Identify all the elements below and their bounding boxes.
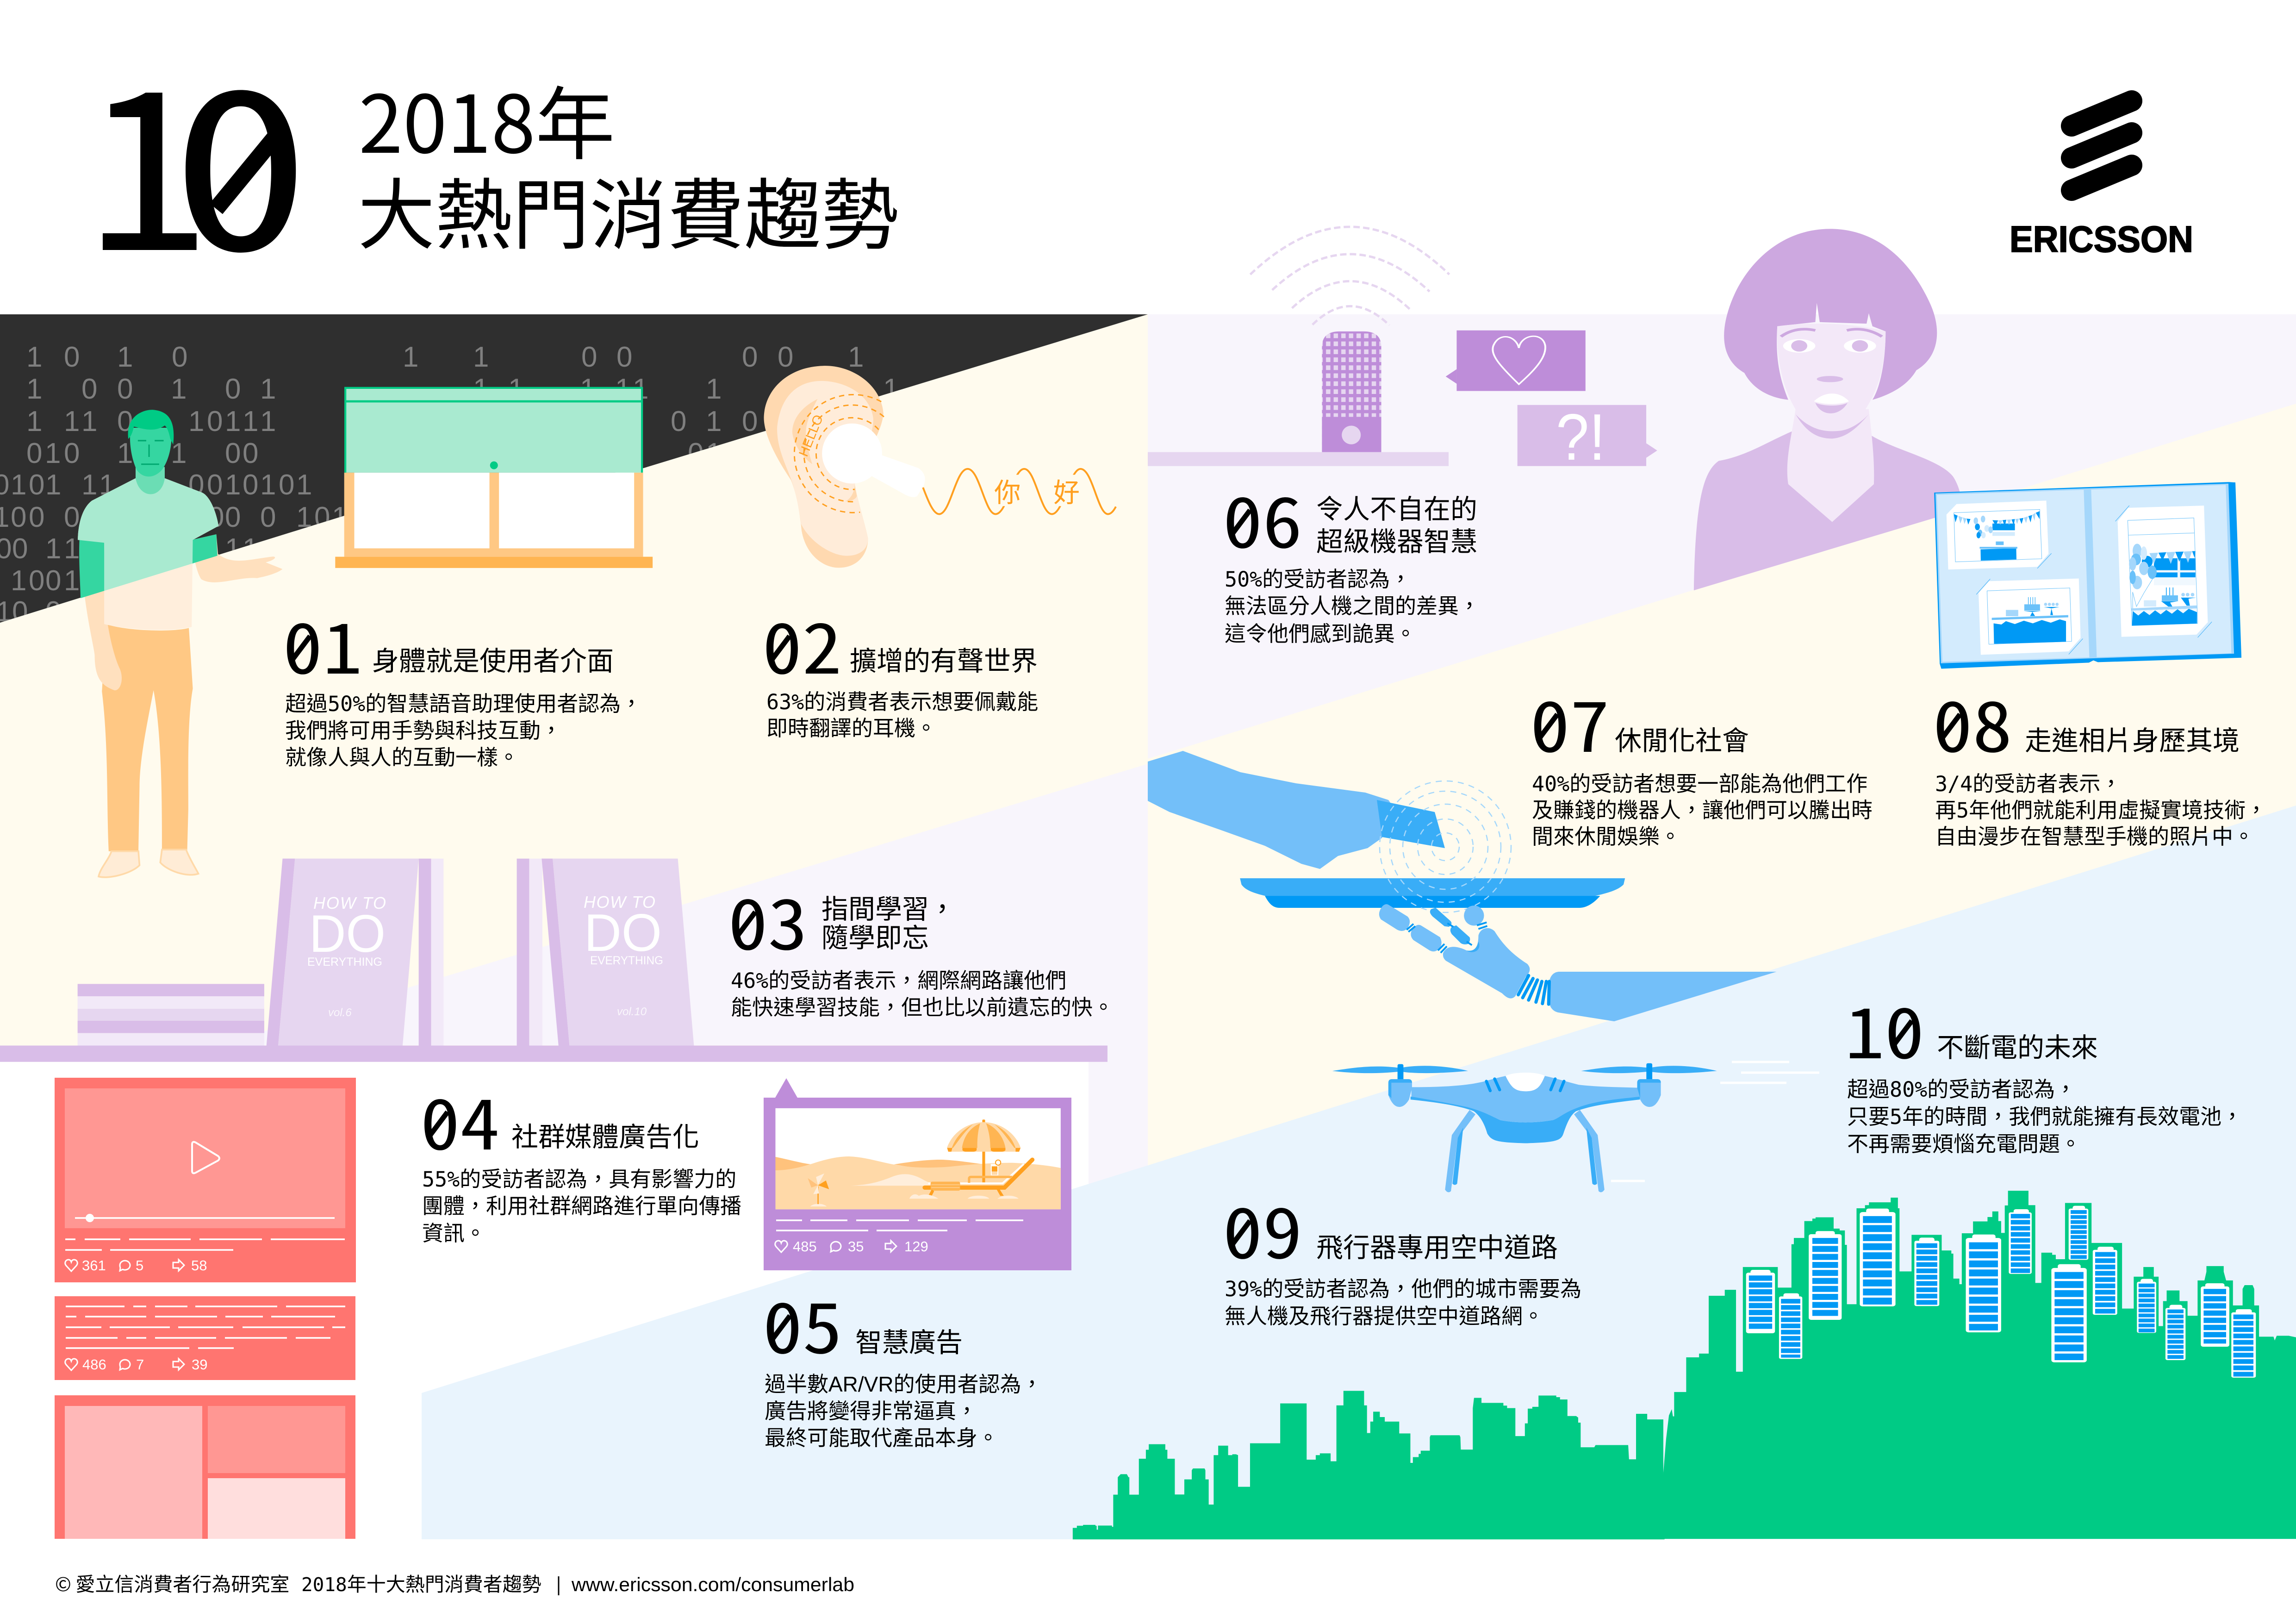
dark binary code background: 111010111010 — [26, 406, 758, 437]
illustration: how-to book vol.6: DO — [309, 905, 386, 963]
section 04: 團體，利用社群網路進行單向傳播 — [422, 1189, 741, 1220]
footer credit line: www.ericsson.com/consumerlab — [571, 1574, 854, 1595]
illustration: sound wave with greeting: 你 — [994, 471, 1021, 510]
section 10: 超過80%的受訪者認為， — [1847, 1073, 2076, 1103]
illustration: delivery drone — [1332, 1063, 1717, 1192]
section 06: 06 — [1223, 468, 1302, 568]
illustration: man gesturing — [78, 410, 282, 877]
section 02 — [762, 593, 1038, 742]
illustration: woman with bob haircut — [1694, 229, 1961, 590]
section 07 — [1530, 672, 1873, 850]
footer credit line — [55, 1569, 854, 1597]
section 05: 智慧廣告 — [855, 1321, 963, 1360]
footer credit line: 2018年十大熱門消費者趨勢 — [301, 1569, 541, 1597]
social card: text post: 39 — [192, 1356, 207, 1373]
title: 2018 trends heading: 2018年 — [359, 60, 615, 176]
section 06: 令人不自在的 — [1316, 487, 1477, 526]
illustration: how-to book vol.6 — [267, 859, 443, 1045]
illustration: photo album — [1934, 482, 2241, 668]
ad card: beach post — [764, 1078, 1071, 1270]
illustration: heart speech bubble — [1446, 331, 1586, 391]
social card: photo grid — [55, 1395, 355, 1539]
dark binary code background: 1000000101 — [0, 501, 348, 533]
section 02: 即時翻譯的耳機。 — [766, 712, 937, 742]
section 03: 隨學即忘 — [821, 916, 929, 955]
ad card: beach post: 485 — [793, 1238, 817, 1255]
section 05: 最終可能取代產品本身。 — [765, 1421, 999, 1452]
section 06: 無法區分人機之間的差異， — [1225, 589, 1480, 620]
section 01 — [283, 593, 642, 771]
illustration: sound wave with greeting: 好 — [1053, 471, 1080, 510]
illustration: how-to book vol.10: DO — [584, 904, 662, 962]
section 10: 不斷電的未來 — [1937, 1026, 2098, 1065]
section 01: 身體就是使用者介面 — [372, 639, 614, 678]
section 05: 過半數AR/VR的使用者認為， — [765, 1368, 1043, 1398]
section 03: 03 — [728, 869, 808, 970]
social card: video post: 5 — [136, 1257, 143, 1274]
illustration: ear with translating earbud: HELLO — [796, 413, 826, 459]
section 03: 指間學習， — [821, 887, 956, 926]
section 09: 39%的受訪者認為，他們的城市需要為 — [1225, 1272, 1581, 1303]
illustration: question speech bubble — [1518, 400, 1657, 474]
title: big number 10: 0 — [171, 0, 311, 313]
section 06: 這令他們感到詭異。 — [1225, 617, 1416, 648]
social card: text post: 486 — [82, 1356, 106, 1373]
dark binary code background: 001111 — [0, 533, 258, 565]
beach scene picture — [776, 1108, 1061, 1209]
section 06: 50%的受訪者認為， — [1225, 562, 1411, 593]
section 07: 及賺錢的機器人，讓他們可以騰出時 — [1532, 793, 1873, 824]
dark binary code background: 10101100001 — [26, 341, 864, 373]
section 02: 擴增的有聲世界 — [850, 639, 1038, 678]
illustration: how-to book vol.10: HOW TO — [584, 893, 655, 912]
section 09: 無人機及飛行器提供空中道路網。 — [1225, 1299, 1544, 1330]
illustration: serving tray — [1240, 878, 1625, 908]
section 07: 07 — [1530, 672, 1610, 772]
illustration: sound wave with greeting — [923, 469, 1116, 514]
section 05 — [763, 1273, 1043, 1452]
section 04 — [420, 1069, 741, 1247]
social card: video post — [55, 1078, 356, 1282]
title: 2018 trends heading: 大熱門消費趨勢 — [358, 153, 899, 265]
dark binary code background — [0, 314, 1148, 628]
illustration: question speech bubble: ?! — [1556, 400, 1605, 474]
section 08: 走進相片身歷其境 — [2025, 719, 2240, 758]
section 09 — [1223, 1178, 1581, 1330]
illustration: human hand handing card — [1148, 751, 1445, 869]
icon: play button — [192, 1142, 219, 1173]
section 04: 04 — [420, 1069, 500, 1170]
illustration: how-to book vol.6: HOW TO — [313, 893, 386, 912]
photo 3 — [2118, 506, 2208, 637]
section 03 — [728, 869, 1114, 1021]
section 08: 自由漫步在智慧型手機的照片中。 — [1935, 820, 2254, 850]
section 02: 63%的消費者表示想要佩戴能 — [766, 685, 1038, 716]
social card: text post — [55, 1296, 355, 1380]
photo 1 — [1947, 500, 2048, 569]
section 01: 01 — [283, 593, 362, 694]
section 10: 只要5年的時間，我們就能擁有長效電池， — [1847, 1100, 2243, 1131]
ad card: beach post: 129 — [904, 1238, 928, 1255]
illustration: robot hand and forearm — [1379, 904, 1777, 1021]
illustration: interactive cabinet — [335, 388, 653, 568]
section 05: 廣告將變得非常逼真， — [765, 1394, 977, 1425]
section 10: 不再需要煩惱充電問題。 — [1847, 1127, 2081, 1158]
dark binary code background: 010110001 — [26, 437, 722, 469]
illustration: how-to book vol.6: vol.6 — [328, 1006, 352, 1019]
footer credit line: © 愛立信消費者行為研究室 — [55, 1569, 289, 1597]
section 08: 08 — [1933, 672, 2012, 772]
section 08 — [1933, 672, 2267, 850]
illustration: book stack and shelf — [0, 984, 1108, 1062]
illustration: how-to book vol.6: EVERYTHING — [307, 956, 382, 968]
Ericsson logo — [2010, 101, 2193, 260]
section 10 — [1845, 978, 2243, 1158]
social card: video post: 58 — [191, 1257, 207, 1274]
section 07: 間來休閒娛樂。 — [1532, 820, 1681, 850]
social card: text post: 7 — [136, 1356, 144, 1373]
section 10: 10 — [1845, 978, 1924, 1079]
social card: video post: 361 — [82, 1257, 106, 1274]
section 04: 社群媒體廣告化 — [511, 1115, 699, 1154]
dark binary code background: 0101110010101 — [0, 469, 312, 501]
illustration: smart speaker on shelf — [1148, 227, 1450, 466]
dark binary code background: 1001011111111 — [26, 373, 899, 405]
section 05: 05 — [763, 1273, 842, 1374]
section 02: 02 — [762, 593, 842, 694]
section 09: 飛行器專用空中道路 — [1316, 1226, 1558, 1265]
section 08: 3/4的受訪者表示， — [1935, 767, 2122, 798]
title: 2018 trends heading — [358, 60, 899, 265]
illustration: signal rings around card — [1380, 781, 1511, 912]
motion lines behind drone — [1611, 1062, 1819, 1181]
section 03: 46%的受訪者表示，網際網路讓他們 — [731, 964, 1066, 994]
illustration: green city skyline with battery buildings — [1663, 1191, 2296, 1539]
title: big number 10 — [87, 0, 311, 314]
section 06 — [1223, 468, 1480, 648]
title: big number 10: 1 — [87, 0, 208, 314]
section 01: 超過50%的智慧語音助理使用者認為， — [285, 687, 642, 718]
illustration: how-to book vol.10: EVERYTHING — [590, 954, 663, 967]
illustration: how-to book vol.10 — [517, 859, 694, 1045]
Ericsson logo: ERICSSON — [2010, 219, 2193, 260]
section 04: 55%的受訪者認為，具有影響力的 — [422, 1162, 736, 1193]
section 01: 我們將可用手勢與科技互動， — [285, 714, 562, 744]
section 03: 能快速學習技能，但也比以前遺忘的快。 — [731, 991, 1114, 1021]
section 04: 資訊。 — [422, 1217, 486, 1247]
illustration: how-to book vol.10: vol.10 — [617, 1006, 647, 1018]
dark binary code background: 10011 — [11, 565, 97, 597]
section 01: 就像人與人的互動一樣。 — [285, 741, 519, 771]
illustration: green city skyline, left part — [1073, 1391, 1665, 1539]
section 07: 40%的受訪者想要一部能為他們工作 — [1532, 767, 1867, 798]
section 07: 休閒化社會 — [1615, 719, 1749, 758]
photo 2 — [1979, 579, 2081, 655]
section 09: 09 — [1223, 1178, 1302, 1279]
ad card: beach post: 35 — [848, 1238, 864, 1255]
section 08: 再5年他們就能利用虛擬實境技術， — [1935, 793, 2267, 824]
illustration: ear with translating earbud — [764, 366, 925, 568]
section 06: 超級機器智慧 — [1316, 520, 1477, 559]
